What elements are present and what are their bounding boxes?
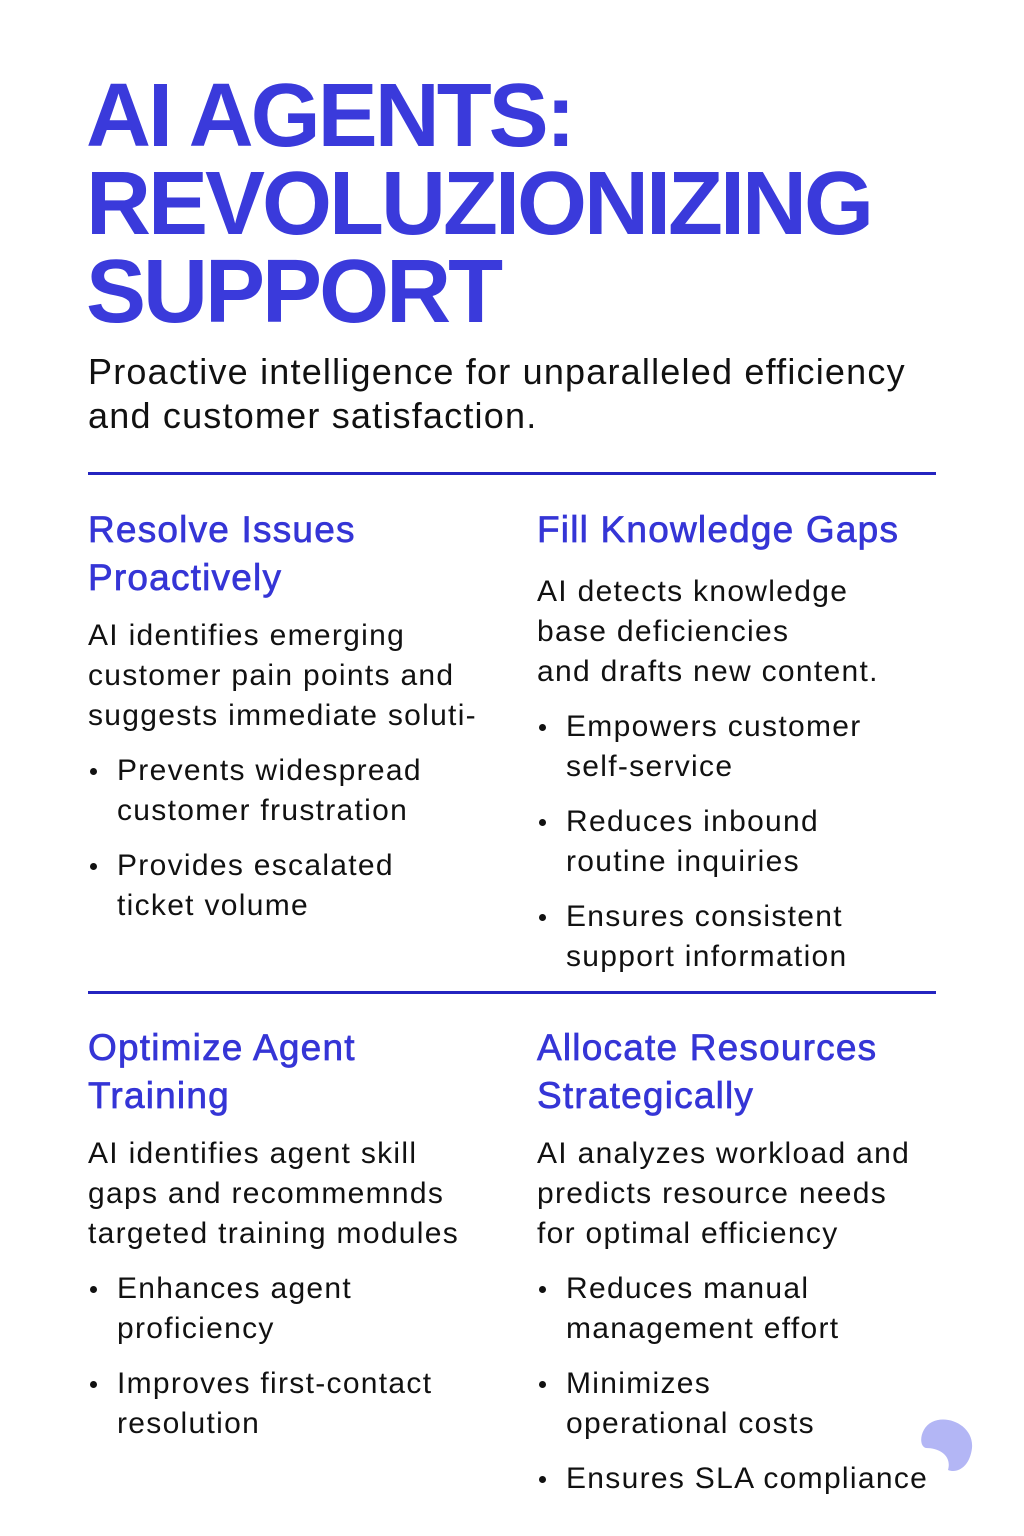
body: fill knowledge gaps: and drafts new content. xyxy=(537,655,879,688)
panel: allocate resources xyxy=(536,1027,928,1495)
body: allocate resources: for optimal efficiency xyxy=(537,1217,839,1250)
panel: optimize agent training xyxy=(88,1027,459,1440)
subtitle: and customer satisfaction. xyxy=(88,395,537,436)
body: allocate resources: AI analyzes workload and xyxy=(537,1137,910,1170)
body: resolve issues xyxy=(88,619,477,922)
subtitle: Proactive intelligence for unparalleled efficiency xyxy=(88,351,906,392)
body: optimize training xyxy=(88,1137,459,1440)
body: optimize training: resolution xyxy=(117,1407,260,1440)
body: fill knowledge gaps: support information xyxy=(566,940,848,973)
body: resolve issues: customer pain points and xyxy=(88,659,454,692)
icon: corner blob xyxy=(921,1420,972,1471)
body: fill knowledge gaps: self-service xyxy=(566,750,733,783)
body: allocate resources: Minimizes xyxy=(566,1367,711,1400)
body: optimize training: targeted training modules xyxy=(88,1217,459,1250)
body: allocate resources: operational costs xyxy=(566,1407,815,1440)
body: resolve issues: AI identifies emerging xyxy=(88,619,405,652)
title: REVOLUZIONIZING xyxy=(86,154,871,254)
body: fill knowledge gaps: routine inquiries xyxy=(566,845,800,878)
body: resolve issues: ticket volume xyxy=(117,889,309,922)
heading: fill knowledge gaps: Fill Knowledge Gaps xyxy=(537,509,899,550)
body: optimize training: Improves first-contact xyxy=(117,1367,432,1400)
panel: fill knowledge gaps xyxy=(537,509,899,973)
body: optimize training: Enhances agent xyxy=(117,1272,352,1305)
body: allocate resources xyxy=(537,1137,928,1495)
subtitle xyxy=(88,351,906,436)
body: fill knowledge gaps: AI detects knowledge xyxy=(537,575,848,608)
heading: resolve issues: Resolve Issues xyxy=(88,509,356,550)
body: optimize training: proficiency xyxy=(117,1312,275,1345)
body: allocate resources: management effort xyxy=(566,1312,839,1345)
body: fill knowledge gaps xyxy=(537,575,879,973)
title: SUPPORT xyxy=(86,242,500,342)
body: resolve issues: Prevents widespread xyxy=(117,754,422,787)
heading: allocate resources: Strategically xyxy=(537,1075,754,1116)
body: fill knowledge gaps: Reduces inbound xyxy=(566,805,819,838)
body: resolve issues: customer frustration xyxy=(117,794,408,827)
heading: allocate resources: Allocate Resources xyxy=(537,1027,877,1068)
body: allocate resources: predicts resource needs xyxy=(537,1177,887,1210)
body: optimize training: AI identifies agent skill xyxy=(88,1137,417,1170)
body: allocate resources: Reduces manual xyxy=(566,1272,809,1305)
body: fill knowledge gaps: Empowers customer xyxy=(566,710,862,743)
title: AI AGENTS: xyxy=(86,66,573,166)
heading: optimize training: Training xyxy=(88,1075,230,1116)
body: fill knowledge gaps: Ensures consistent xyxy=(566,900,843,933)
title xyxy=(86,66,871,342)
heading: allocate resources xyxy=(536,1027,877,1116)
heading: optimize training: Optimize Agent xyxy=(88,1027,356,1068)
panel: resolve issues xyxy=(88,509,477,922)
body: resolve issues: suggests immediate soluti- xyxy=(88,699,477,732)
body: optimize training: gaps and recommemnds xyxy=(88,1177,444,1210)
body: allocate resources: Ensures SLA compliance xyxy=(566,1462,928,1495)
heading: resolve issues: Proactively xyxy=(88,557,282,598)
heading: resolve issues xyxy=(88,509,356,598)
heading: optimize training xyxy=(88,1027,356,1116)
body: fill knowledge gaps: base deficiencies xyxy=(537,615,789,648)
body: resolve issues: Provides escalated xyxy=(117,849,394,882)
